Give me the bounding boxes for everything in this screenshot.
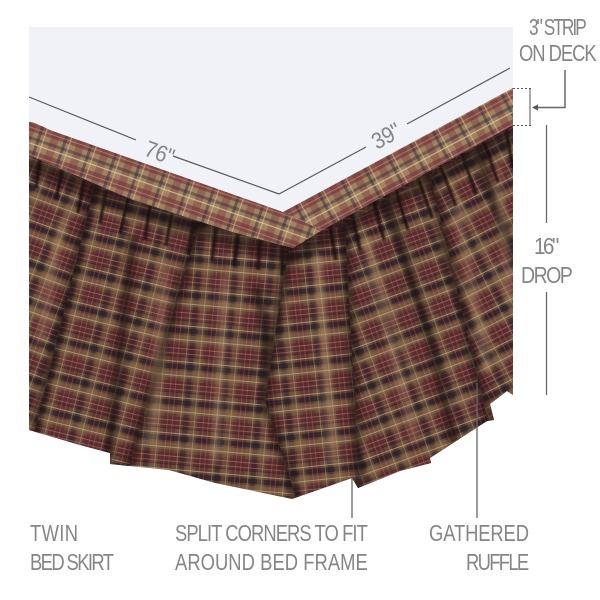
mattress deck — [29, 27, 513, 212]
label: split corners: AROUND BED FRAME — [175, 550, 368, 576]
gathered ruffle shading — [36, 130, 513, 276]
top band: right side — [283, 88, 513, 230]
label: twin bed skirt: TWIN — [30, 521, 78, 547]
plaid skirt panel — [20, 120, 520, 510]
label: twin bed skirt — [30, 521, 114, 576]
76 inch label: 76" — [141, 135, 178, 170]
label: 16 inch drop — [521, 233, 573, 288]
label: gathered ruffle: GATHERED — [429, 521, 529, 547]
39 inch measure line — [279, 68, 510, 194]
top band: left side — [29, 122, 322, 248]
label: gathered ruffle: RUFFLE — [466, 550, 529, 576]
strip bracket — [513, 88, 533, 126]
76 inch measure line — [29, 97, 279, 194]
label: split corners — [175, 521, 368, 576]
label: 16 inch drop: DROP — [521, 263, 573, 288]
fabric folds — [30, 150, 513, 510]
leader: split corners — [351, 478, 353, 518]
39 inch label: 39" — [367, 117, 406, 155]
label: 3 inch strip on deck: 3" STRIP — [529, 16, 587, 41]
under-band shadow — [29, 130, 513, 253]
leader: gathered ruffle — [476, 383, 478, 518]
label: split corners: SPLIT CORNERS TO FIT — [175, 521, 368, 547]
label: 16 inch drop: 16" — [534, 233, 559, 259]
arrow: strip callout — [532, 70, 565, 110]
label: twin bed skirt: BED SKIRT — [30, 550, 114, 576]
label: 3 inch strip on deck: ON DECK — [519, 41, 597, 67]
label: 3 inch strip on deck — [519, 16, 597, 67]
16 inch drop line — [546, 125, 548, 395]
label: gathered ruffle — [429, 521, 529, 576]
